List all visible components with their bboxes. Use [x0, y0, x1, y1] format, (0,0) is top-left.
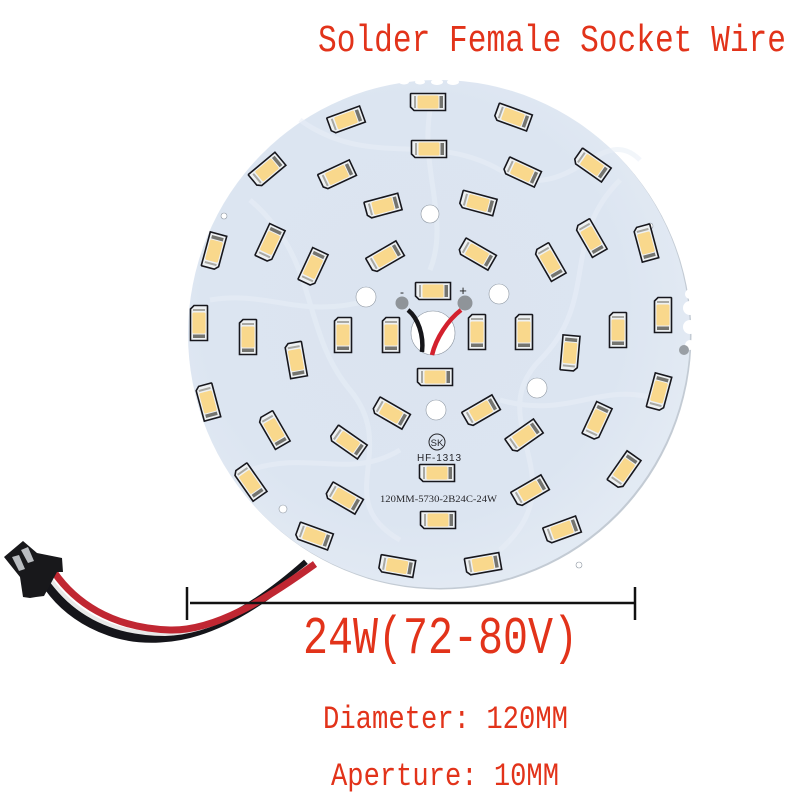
connector plug	[4, 541, 63, 598]
power rating label: 24W(72-80V)	[303, 609, 578, 669]
board markings	[380, 434, 498, 504]
power cable	[44, 563, 315, 638]
panel: circular LED board	[188, 79, 697, 590]
solder pads and centre wires: +	[459, 283, 467, 298]
diameter label: Diameter: 120MM	[323, 701, 568, 738]
solder pads and centre wires	[396, 283, 472, 355]
mounting and centre holes	[221, 205, 653, 568]
solder pads and centre wires: -	[400, 285, 404, 299]
LED chips	[190, 94, 672, 577]
aperture label: Aperture: 10MM	[331, 758, 559, 795]
board markings: 120MM-5730-2B24C-24W	[380, 494, 498, 504]
board markings: HF-1313	[417, 453, 461, 464]
board markings: SK	[431, 438, 444, 449]
dimension line	[187, 587, 635, 620]
